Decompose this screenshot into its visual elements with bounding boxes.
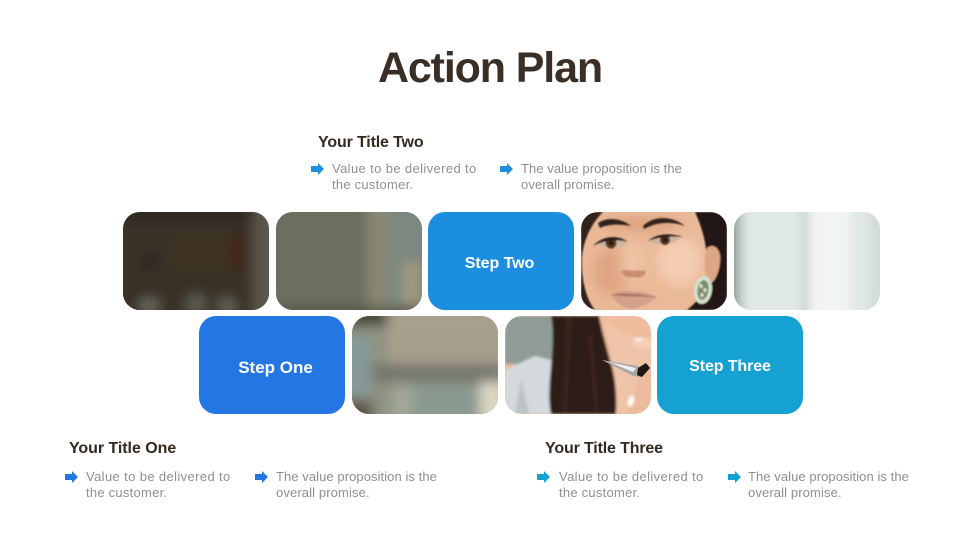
panel: your title one	[65, 440, 437, 500]
panel: your title three	[537, 440, 909, 500]
heading: your title three: Your Title Three	[545, 440, 663, 457]
text: value delivered	[559, 469, 704, 500]
text: value proposition: overall promise.	[748, 485, 842, 500]
icon: arrow	[728, 471, 741, 483]
text: value delivered: the customer.	[559, 485, 640, 500]
text: value proposition: overall promise.	[521, 177, 615, 192]
text: value delivered	[86, 469, 231, 500]
title: Action Plan	[378, 44, 602, 92]
text: value delivered: the customer.	[332, 177, 413, 192]
tile: step two: Step Two	[465, 255, 534, 272]
tile: step one: Step One	[238, 358, 313, 377]
tile: step three: Step Three	[689, 358, 771, 375]
photo tile: blurred room	[352, 316, 498, 414]
icon: arrow	[311, 163, 324, 175]
text: value proposition: overall promise.	[276, 485, 370, 500]
photo tile: woman's face	[581, 212, 727, 310]
icon: arrow	[500, 163, 513, 175]
photo tile: dark shelves	[123, 212, 269, 310]
heading: your title one: Your Title One	[69, 440, 176, 457]
icon: arrow	[65, 471, 78, 483]
text: value delivered: Value to be delivered to	[559, 469, 704, 484]
photo tile: grey wall	[276, 212, 422, 310]
text: value proposition: The value proposition is the	[276, 469, 437, 484]
photo tile: woman with pen	[505, 316, 651, 414]
text: value proposition	[276, 469, 437, 500]
panel: your title two	[311, 134, 682, 192]
text: value proposition: The value proposition is the	[748, 469, 909, 484]
heading: your title two: Your Title Two	[318, 134, 423, 151]
text: value delivered: Value to be delivered to	[332, 161, 477, 176]
pen	[602, 360, 650, 377]
text: value proposition	[748, 469, 909, 500]
text: value proposition	[521, 161, 682, 192]
tile: step two	[428, 212, 574, 310]
text: value proposition: The value proposition is the	[521, 161, 682, 176]
text: value delivered: the customer.	[86, 485, 167, 500]
icon: arrow	[255, 471, 268, 483]
photo tile: pale curtain	[734, 212, 880, 310]
tile: step three	[657, 316, 803, 414]
icon: arrow	[537, 471, 550, 483]
text: value delivered	[332, 161, 477, 192]
tile: step one	[199, 316, 345, 414]
text: value delivered: Value to be delivered to	[86, 469, 231, 484]
